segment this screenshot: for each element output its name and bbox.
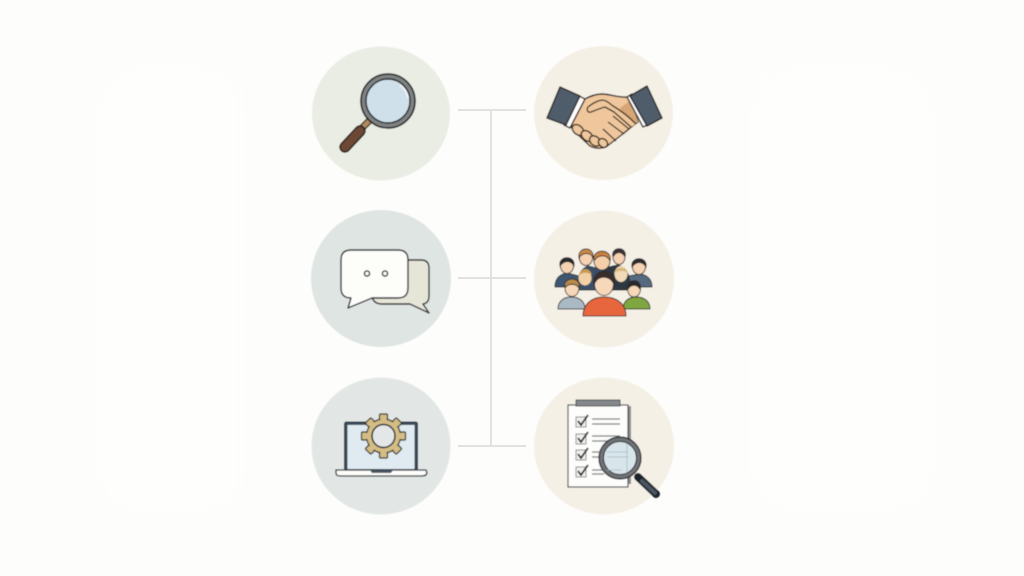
panel: technology step: [312, 378, 450, 514]
panel: partnership step: [534, 46, 673, 180]
icon: magnifying glass: [345, 74, 415, 147]
panel: team step: [534, 210, 674, 348]
panel: conversation step: [311, 210, 451, 347]
panel: review step: [534, 378, 674, 514]
icon: handshake: [547, 86, 662, 149]
icon: speech bubbles: [341, 250, 429, 313]
icon: checklist with magnifier: [568, 400, 656, 494]
icon: laptop with gear: [336, 414, 427, 476]
icon: gear: [362, 414, 406, 458]
icon: group of people: [555, 249, 652, 316]
connector lines: [458, 110, 526, 446]
panel: search step: [312, 46, 450, 180]
